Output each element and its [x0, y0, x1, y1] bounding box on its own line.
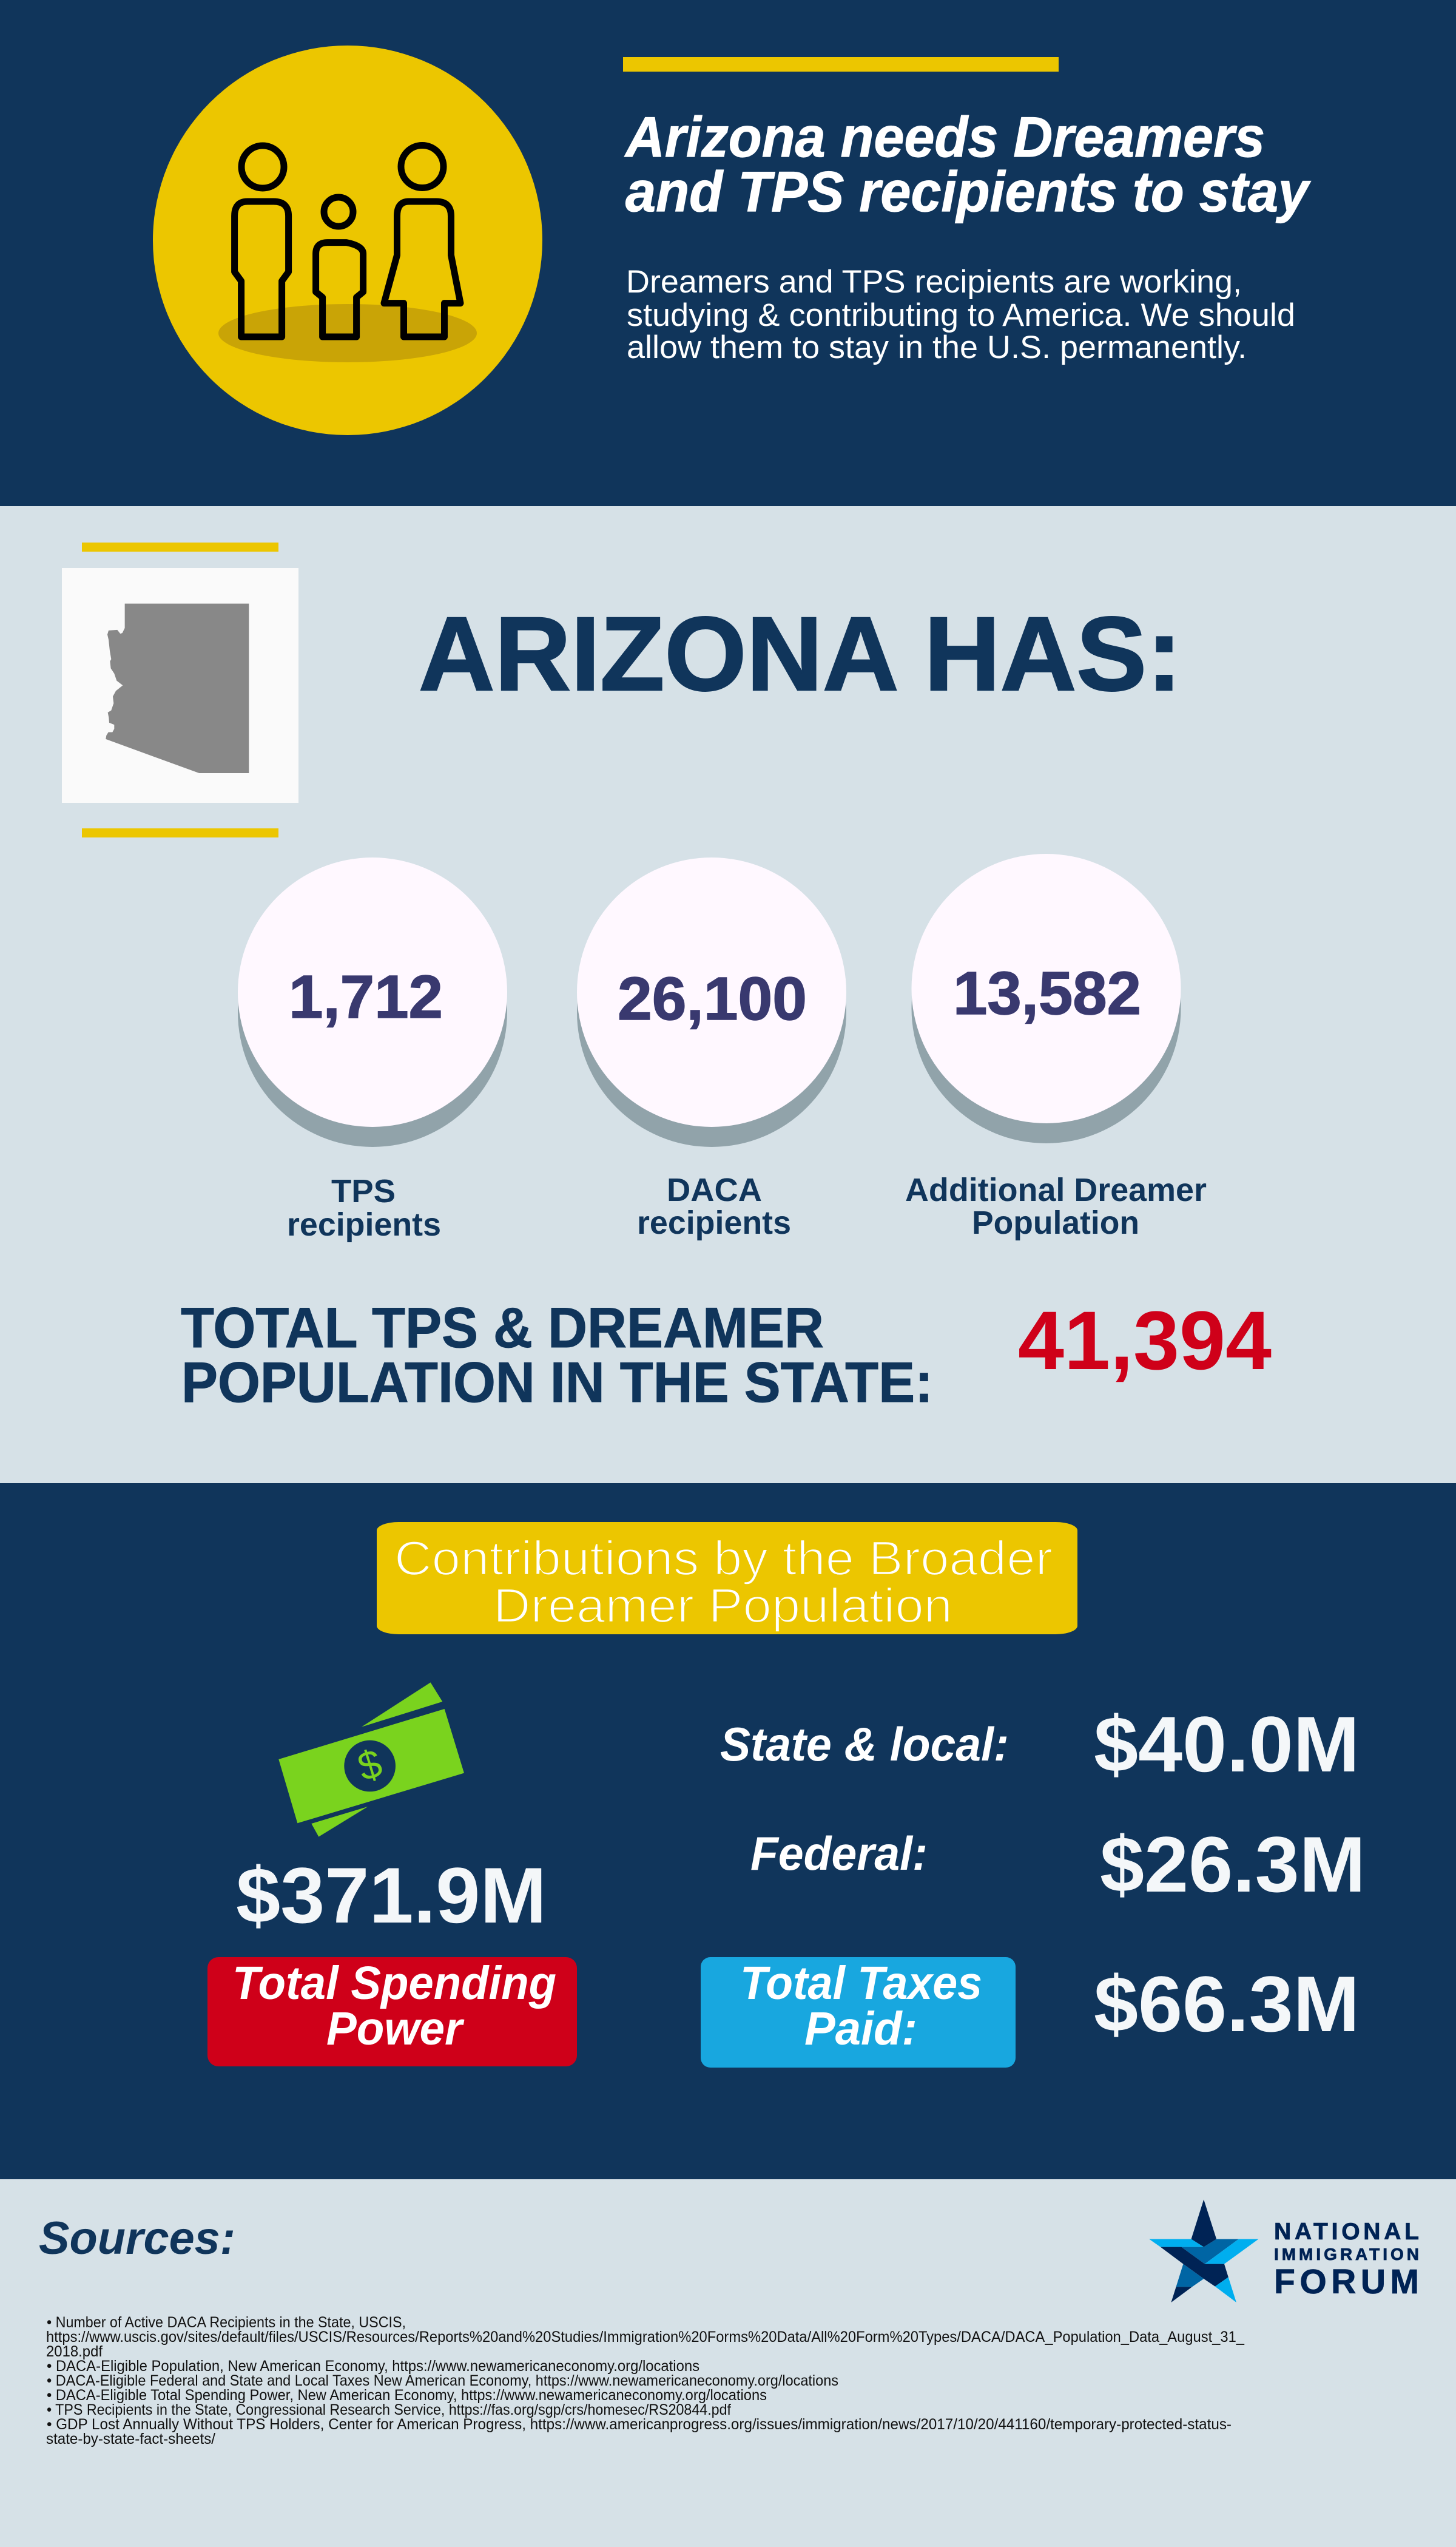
- title: Arizona needs Dreamers: [624, 105, 1265, 169]
- logo: National Immigration Forum: NATIONAL: [1274, 2219, 1419, 2245]
- stat: additional Dreamer population: Additional Dreamer: [905, 1172, 1207, 1208]
- stat: federal taxes: Federal:: [750, 1827, 928, 1880]
- heading: contributions banner: [377, 1522, 1077, 1634]
- stat: DACA recipients: recipients: [637, 1205, 791, 1241]
- stat: DACA recipients: [577, 857, 846, 1241]
- panel: sources: [0, 2179, 1456, 2547]
- heading: contributions banner: Dreamer Population: [493, 1578, 952, 1632]
- stat: federal taxes: [750, 1820, 1366, 1909]
- stat: DACA recipients: DACA: [667, 1172, 762, 1208]
- icon: family in yellow circle: [153, 46, 542, 435]
- source list: • Number of Active DACA Recipients in the State, USCIS,: [47, 2314, 406, 2331]
- title: [624, 105, 1312, 223]
- intro text: studying & contributing to America. We should: [627, 297, 1295, 333]
- stat: TPS recipients: [238, 857, 507, 1243]
- stat: total spending power: Power: [326, 2003, 465, 2055]
- source list: [46, 2314, 1245, 2447]
- stat: total taxes paid: Paid:: [804, 2003, 917, 2055]
- stat: state and local taxes: State & local:: [720, 1717, 1009, 1771]
- stat: additional Dreamer population: 13,582: [953, 959, 1141, 1027]
- stat: total spending power: $371.9M: [236, 1851, 547, 1940]
- stat: TPS recipients: 1,712: [289, 963, 443, 1031]
- heading: Arizona has: ARIZONA HAS:: [419, 595, 1182, 712]
- stat: federal taxes: $26.3M: [1100, 1820, 1366, 1909]
- stat: DACA recipients: 26,100: [618, 965, 807, 1033]
- stat: total spending power: [207, 1851, 577, 2066]
- stat: total taxes paid: $66.3M: [1094, 1960, 1360, 2048]
- stat: additional Dreamer population: [905, 854, 1207, 1241]
- stat: total spending power: Total Spending: [232, 1957, 556, 2009]
- intro text: Dreamers and TPS recipients are working,: [626, 264, 1242, 300]
- icon: dollar bill: $: [352, 1740, 387, 1790]
- source list: 2018.pdf: [46, 2343, 103, 2360]
- stat: total taxes paid: [701, 1957, 1360, 2068]
- source list: • DACA-Eligible Population, New American Economy, https://www.newamericaneconomy.org/locations: [47, 2358, 699, 2375]
- total population number: 41,394: [1018, 1294, 1272, 1387]
- stat: total taxes paid: Total Taxes: [740, 1957, 982, 2009]
- accent bar: [623, 57, 1059, 72]
- total population label: TOTAL TPS & DREAMER: [181, 1296, 824, 1359]
- panel: Arizona population: [0, 506, 1456, 1483]
- source list: state-by-state-fact-sheets/: [46, 2430, 215, 2447]
- stat: state and local taxes: [720, 1700, 1360, 1788]
- source list: • DACA-Eligible Federal and State and Local Taxes New American Economy, https://www.newamericaneconomy.org/locations: [47, 2372, 838, 2389]
- source list: https://www.uscis.gov/sites/default/files/USCIS/Resources/Reports%20and%20Studies/Immigration%20Forms%20Data/All%20Form%20Types/DACA/DACA_Population_Data_August_31_: [46, 2329, 1245, 2346]
- panel: header: [0, 0, 1456, 506]
- stat: TPS recipients: TPS: [331, 1173, 396, 1209]
- stat: additional Dreamer population: Population: [972, 1205, 1139, 1241]
- logo: National Immigration Forum: FORUM: [1274, 2262, 1419, 2301]
- heading: sources: Sources:: [39, 2213, 235, 2264]
- icon: Arizona state map: [62, 543, 298, 837]
- intro text: allow them to stay in the U.S. permanently.: [627, 330, 1247, 365]
- total population label: POPULATION IN THE STATE:: [181, 1350, 933, 1414]
- stat: TPS recipients: recipients: [287, 1206, 441, 1243]
- intro text: [626, 264, 1295, 365]
- logo: National Immigration Forum: [1149, 2199, 1419, 2302]
- heading: contributions banner: Contributions by the Broader: [394, 1531, 1053, 1585]
- source list: • DACA-Eligible Total Spending Power, New American Economy, https://www.newamericaneconomy.org/locations: [47, 2387, 767, 2404]
- logo: National Immigration Forum: IMMIGRATION: [1274, 2245, 1419, 2264]
- source list: • TPS Recipients in the State, Congressional Research Service, https://fas.org/sgp/crs/homesec/RS20844.pdf: [47, 2401, 731, 2418]
- icon: dollar bill: [278, 1682, 464, 1837]
- panel: contributions: [0, 1483, 1456, 2179]
- title: and TPS recipients to stay: [625, 160, 1312, 223]
- source list: • GDP Lost Annually Without TPS Holders, Center for American Progress, https://www.americanprogress.org/issues/immigration/news/2017/10/20/441160/temporary-protected-status-: [47, 2416, 1232, 2433]
- total population label: [181, 1296, 933, 1414]
- stat: state and local taxes: $40.0M: [1094, 1700, 1360, 1788]
